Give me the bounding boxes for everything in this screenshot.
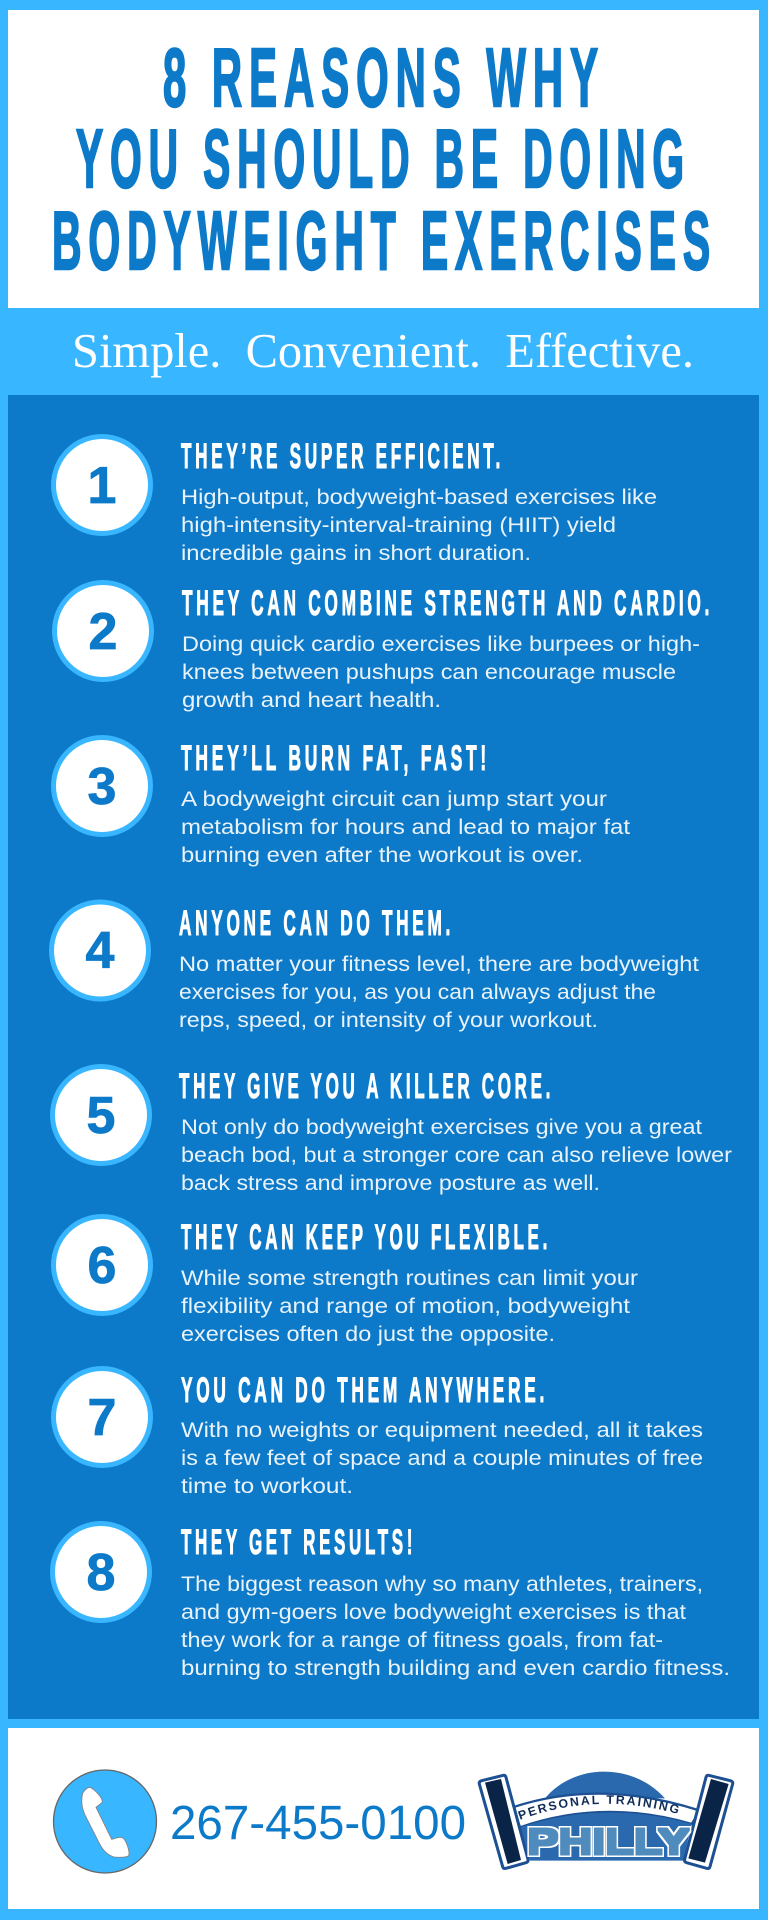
logo lower fill: [520, 1812, 692, 1861]
body 1: incredible gains in short duration.: [181, 542, 531, 565]
body 3: [181, 788, 630, 867]
reason 4: ANYONE CAN DO THEM.: [179, 904, 454, 943]
body 1: High-output, bodyweight-based exercises like: [181, 486, 657, 509]
reason 4: [49, 900, 699, 1032]
number badge 5: [50, 1064, 152, 1166]
number badge 4: 4: [86, 922, 115, 980]
body 4: reps, speed, or intensity of your workout.: [179, 1009, 598, 1032]
number badge 1: 1: [88, 457, 116, 515]
reason 1: [51, 434, 657, 565]
body 2: Doing quick cardio exercises like burpees or high-: [182, 633, 700, 656]
reason 3: [51, 735, 630, 867]
reason 7: [51, 1366, 703, 1498]
reason 8: [50, 1521, 730, 1680]
body 3: metabolism for hours and lead to major fat: [181, 816, 630, 839]
number badge 6: 6: [88, 1237, 116, 1295]
logo left bar: [479, 1775, 528, 1868]
number badge 8: [50, 1521, 152, 1623]
body 6: exercises often do just the opposite.: [181, 1323, 555, 1346]
number badge 8: 8: [87, 1544, 115, 1602]
icon: phone: [54, 1770, 156, 1873]
logo lettering PHILLY: PHILLY: [527, 1821, 689, 1862]
body 1: [181, 486, 657, 565]
body 7: [181, 1419, 703, 1498]
logo dome: [545, 1772, 665, 1798]
body 1: high-intensity-interval-training (HIIT) yield: [181, 514, 616, 537]
body 6: While some strength routines can limit your: [181, 1267, 638, 1290]
body 4: No matter your fitness level, there are bodyweight: [179, 953, 699, 976]
number badge 3: [51, 735, 153, 837]
body 8: burning to strength building and even cardio fitness.: [181, 1657, 730, 1680]
body 6: flexibility and range of motion, bodyweight: [181, 1295, 630, 1318]
body 5: [181, 1116, 732, 1195]
panel: reasons: [8, 395, 759, 1719]
title heading: [52, 31, 717, 287]
panel: title: [8, 10, 759, 308]
body 4: exercises for you, as you can always adjust the: [179, 981, 656, 1004]
body 3: A bodyweight circuit can jump start your: [181, 788, 607, 811]
logo right bar: [685, 1775, 733, 1868]
number badge 1: [51, 434, 153, 536]
logo lettering top: PERSONAL TRAINING: [518, 1795, 679, 1820]
body 8: they work for a range of fitness goals, from fat-: [181, 1629, 663, 1652]
body 7: With no weights or equipment needed, all it takes: [181, 1419, 703, 1442]
body 7: time to workout.: [181, 1475, 353, 1498]
number badge 2: 2: [89, 603, 117, 661]
body 2: growth and heart health.: [182, 689, 441, 712]
body 8: The biggest reason why so many athletes, trainers,: [181, 1573, 703, 1596]
number badge 6: [51, 1214, 153, 1316]
reason 2: [52, 580, 713, 712]
body 6: [181, 1267, 638, 1346]
phone number: 267-455-0100: [170, 1797, 466, 1850]
body 7: is a few feet of space and a couple minutes of free: [181, 1447, 703, 1470]
tagline: Simple. Convenient. Effective.: [72, 323, 694, 378]
reason 8: THEY GET RESULTS!: [181, 1523, 416, 1562]
logo: Personal Training Philly: [478, 1772, 734, 1870]
panel: contact footer: [8, 1728, 759, 1909]
body 8: and gym-goers love bodyweight exercises is that: [181, 1601, 686, 1624]
logo banner: [513, 1794, 700, 1827]
body 5: back stress and improve posture as well.: [181, 1172, 600, 1195]
body 2: knees between pushups can encourage muscle: [182, 661, 676, 684]
number badge 7: 7: [88, 1389, 116, 1447]
reason 5: [50, 1064, 732, 1195]
body 2: [182, 633, 700, 712]
reason 6: [51, 1214, 638, 1346]
body 5: Not only do bodyweight exercises give you a great: [181, 1116, 702, 1139]
body 3: burning even after the workout is over.: [181, 844, 583, 867]
logo curve path for lettering: [520, 1804, 693, 1820]
number badge 4: [49, 900, 151, 1002]
body 5: beach bod, but a stronger core can also relieve lower: [181, 1144, 732, 1167]
number badge 5: 5: [87, 1087, 115, 1145]
number badge 7: [51, 1366, 153, 1468]
number badge 3: 3: [88, 758, 116, 816]
body 8: [181, 1573, 730, 1680]
number badge 2: [52, 580, 154, 682]
body 4: [179, 953, 699, 1032]
